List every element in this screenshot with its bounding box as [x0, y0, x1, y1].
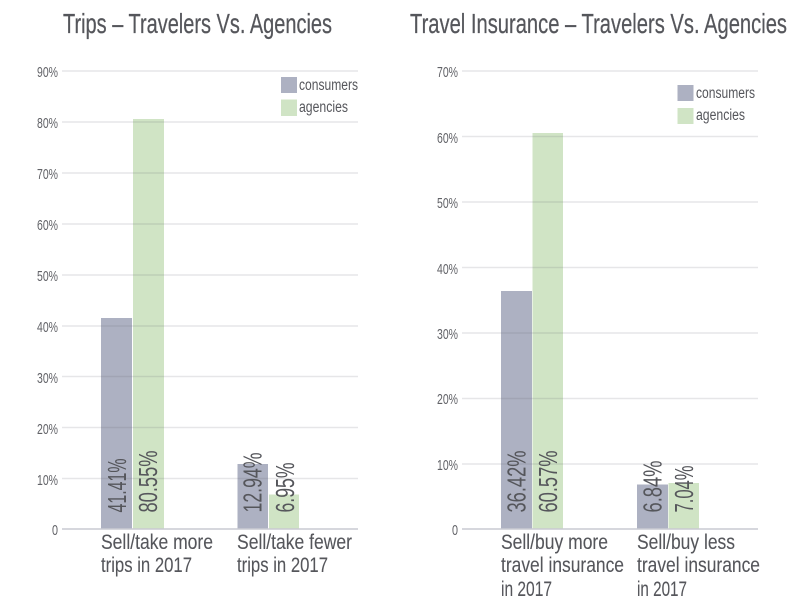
legend: agencies — [696, 107, 745, 124]
y axis labels: 50% — [437, 195, 458, 212]
y axis labels: 10% — [37, 472, 58, 489]
y axis labels: 20% — [437, 391, 458, 408]
legend: agencies — [299, 99, 348, 116]
category label: more trips: Sell/take more — [101, 531, 213, 554]
value labels — [102, 450, 300, 512]
y axis labels: 40% — [37, 319, 58, 336]
legend — [281, 77, 358, 116]
category label: less insurance: Sell/buy less — [637, 531, 735, 554]
value labels: 80.55% — [133, 451, 163, 512]
value labels: 6.84% — [638, 460, 668, 512]
category label: fewer trips: trips in 2017 — [237, 554, 328, 577]
y axis labels: 70% — [37, 166, 58, 183]
bars: sell/buy less insurance — [637, 483, 699, 529]
category label: less insurance: travel insurance — [637, 554, 760, 577]
y axis labels: 90% — [37, 64, 58, 81]
grid lines — [62, 71, 358, 529]
y axis labels: 40% — [437, 261, 458, 278]
bars: sell/take fewer trips — [238, 464, 299, 529]
title: trips: Trips – Travelers Vs. Agencies — [63, 8, 332, 39]
y axis labels: 50% — [37, 268, 58, 285]
y axis labels — [437, 64, 458, 539]
value labels: 6.95% — [270, 462, 300, 512]
value labels: 12.94% — [238, 452, 268, 512]
value labels: 36.42% — [502, 451, 532, 512]
y axis labels: 70% — [437, 64, 458, 81]
panel: travel insurance chart — [410, 8, 787, 601]
y axis labels: 80% — [37, 115, 58, 132]
category label: fewer trips: Sell/take fewer — [237, 531, 352, 554]
y axis labels: 0 — [52, 522, 58, 539]
category label: more insurance: in 2017 — [501, 578, 552, 601]
bars: sell/buy more insurance — [501, 133, 563, 529]
y axis labels: 0 — [452, 522, 458, 539]
y axis labels: 30% — [37, 370, 58, 387]
value labels — [502, 450, 699, 512]
y axis labels: 10% — [437, 457, 458, 474]
value labels: 60.57% — [533, 451, 563, 512]
value labels: 41.41% — [102, 458, 132, 512]
category label: less insurance: in 2017 — [637, 578, 687, 601]
bars: sell/take more trips — [101, 119, 164, 529]
grid lines — [462, 71, 758, 529]
panel: trips chart — [37, 8, 358, 577]
category label: more trips: trips in 2017 — [101, 554, 192, 577]
legend: consumers — [299, 77, 358, 94]
y axis labels — [37, 64, 58, 539]
y axis labels: 60% — [437, 130, 458, 147]
y axis labels: 60% — [37, 217, 58, 234]
y axis labels: 30% — [437, 326, 458, 343]
legend — [678, 85, 755, 124]
category label: more insurance: Sell/buy more — [501, 531, 608, 554]
category label: more insurance: travel insurance — [501, 554, 624, 577]
value labels: 7.04% — [669, 466, 699, 512]
y axis labels: 20% — [37, 421, 58, 438]
legend: consumers — [696, 85, 755, 102]
